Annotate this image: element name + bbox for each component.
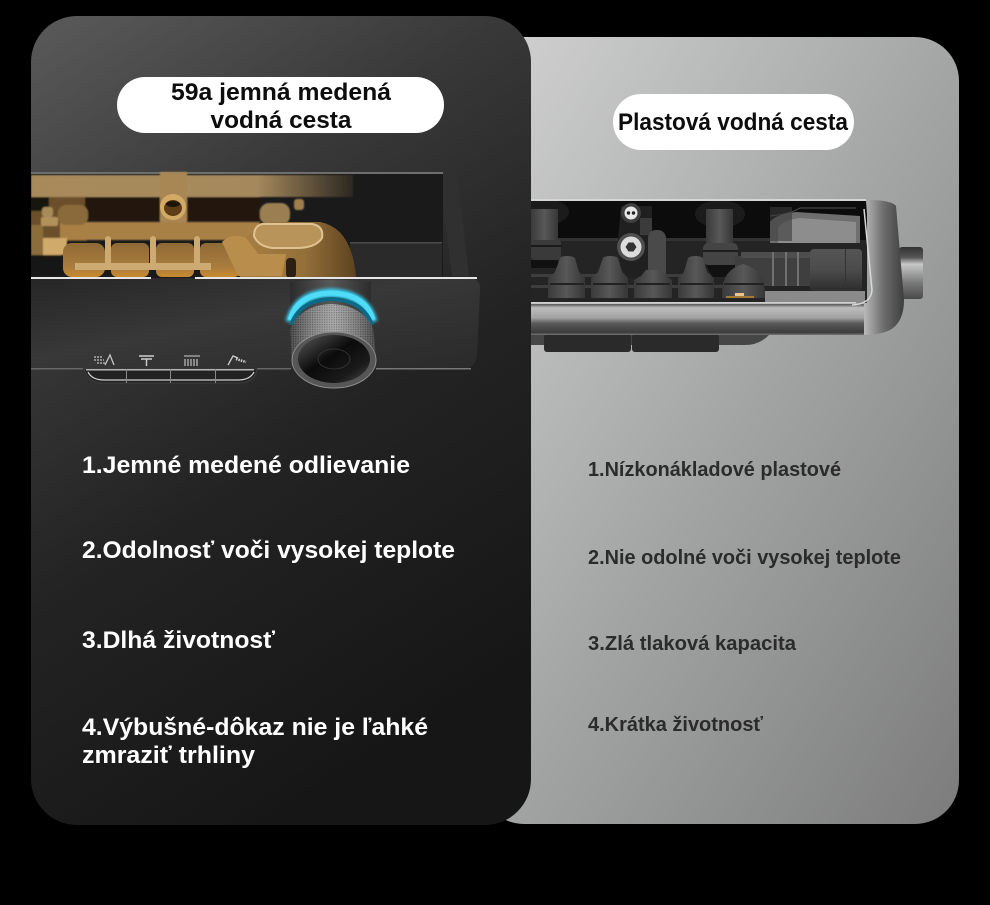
drawback 2: 2.Nie odolné voči vysokej teplote (588, 547, 901, 569)
plastic product illustration (521, 199, 923, 352)
drawback 4: 4.Krátka životnosť (588, 714, 763, 736)
metal housing rail (531, 199, 904, 335)
benefit 4 (82, 714, 428, 769)
icon: shower spray (94, 355, 114, 365)
benefit 4: 4.Výbušné-dôkaz nie je ľahké (82, 714, 428, 741)
benefit 2: 2.Odolnosť voči vysokej teplote (82, 537, 455, 564)
front plastic nozzles (548, 256, 765, 298)
benefit 3: 3.Dlhá životnosť (82, 627, 276, 654)
rotary knob with cyan ring (290, 280, 376, 388)
icon: hand shower (228, 356, 246, 365)
panel: copper water path (31, 16, 531, 825)
icon: overhead rain (184, 356, 200, 366)
label pill: copper (117, 77, 444, 134)
horizontal plastic pipe (735, 249, 862, 291)
label pill: plastic: Plastová vodná cesta (618, 109, 849, 136)
black front panel (31, 277, 480, 370)
copper elbow (222, 222, 356, 278)
benefit 1: 1.Jemné medené odlievanie (82, 452, 410, 479)
copper manifold (31, 171, 353, 256)
drawback 3: 3.Zlá tlaková kapacita (588, 633, 797, 655)
plastic drawbacks list (588, 459, 901, 736)
copper cups and ribs (63, 236, 240, 277)
curved metal liner (770, 212, 860, 243)
under-side buttons (531, 334, 770, 352)
housing cavity (31, 172, 469, 279)
copper benefits list (82, 452, 455, 769)
benefit 4: zmraziť trhliny (82, 742, 256, 769)
label pill: copper: vodná cesta (210, 107, 352, 134)
copper product illustration (31, 172, 480, 388)
mode buttons (84, 355, 257, 383)
label pill: copper: 59a jemná medená (171, 79, 392, 106)
copper socket opening (160, 194, 186, 220)
panel: plastic water path (480, 37, 959, 824)
rear plastic sockets (521, 199, 745, 277)
connector stub (899, 247, 923, 299)
housing interior (531, 200, 871, 305)
icon: T fixture (139, 356, 154, 366)
label pill: plastic (613, 94, 854, 150)
hex ports (617, 203, 666, 280)
drawback 1: 1.Nízkonákladové plastové (588, 459, 841, 481)
